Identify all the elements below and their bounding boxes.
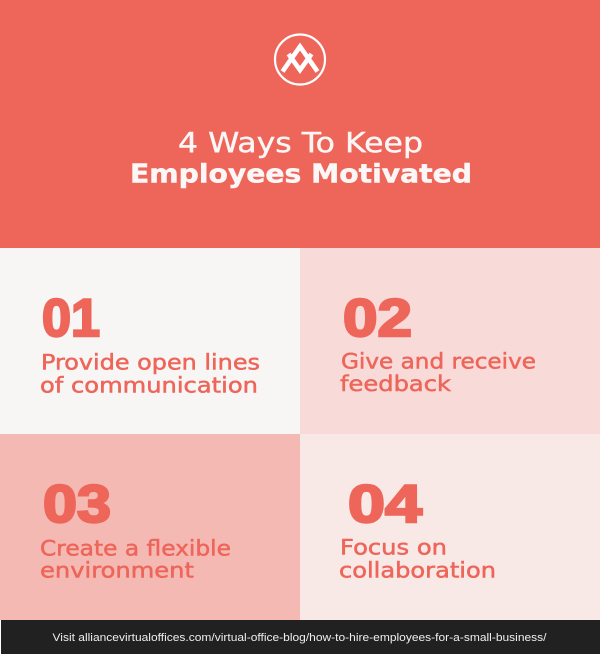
panel: 02 <box>300 248 600 434</box>
text: focus on collaboration: collaboration <box>339 558 496 582</box>
text: focus on collaboration <box>339 536 496 582</box>
number 03: 03 <box>43 475 111 534</box>
panel: header <box>0 0 600 248</box>
icon: logo <box>275 34 325 84</box>
footer link text: Visit alliancevirtualoffices.com/virtual-office-blog/how-to-hire-employees-for-a-small-business/ <box>52 632 548 644</box>
title: Employees Motivated <box>130 160 472 190</box>
text: create a flexible environment: Create a flexible <box>40 536 231 560</box>
title: 4 Ways To Keep <box>178 126 423 159</box>
text: provide open lines of communication <box>40 350 260 398</box>
panel: 03 <box>0 434 300 620</box>
text: give and receive feedback: feedback <box>340 372 452 396</box>
panel: 04 <box>300 434 600 620</box>
number 01: 01 <box>42 289 100 348</box>
number 02: 02 <box>343 289 412 348</box>
footer bar <box>0 620 600 654</box>
text: focus on collaboration: Focus on <box>340 536 447 560</box>
panel: 01 <box>0 248 300 434</box>
text: create a flexible environment <box>40 536 231 582</box>
text: give and receive feedback: Give and receive <box>341 350 536 374</box>
title <box>130 126 472 190</box>
text: give and receive feedback <box>340 350 536 396</box>
number 04: 04 <box>348 475 423 534</box>
text: create a flexible environment: environment <box>40 558 194 582</box>
text: provide open lines of communication: Provide open lines <box>41 350 260 374</box>
text: provide open lines of communication: of communication <box>40 374 258 398</box>
